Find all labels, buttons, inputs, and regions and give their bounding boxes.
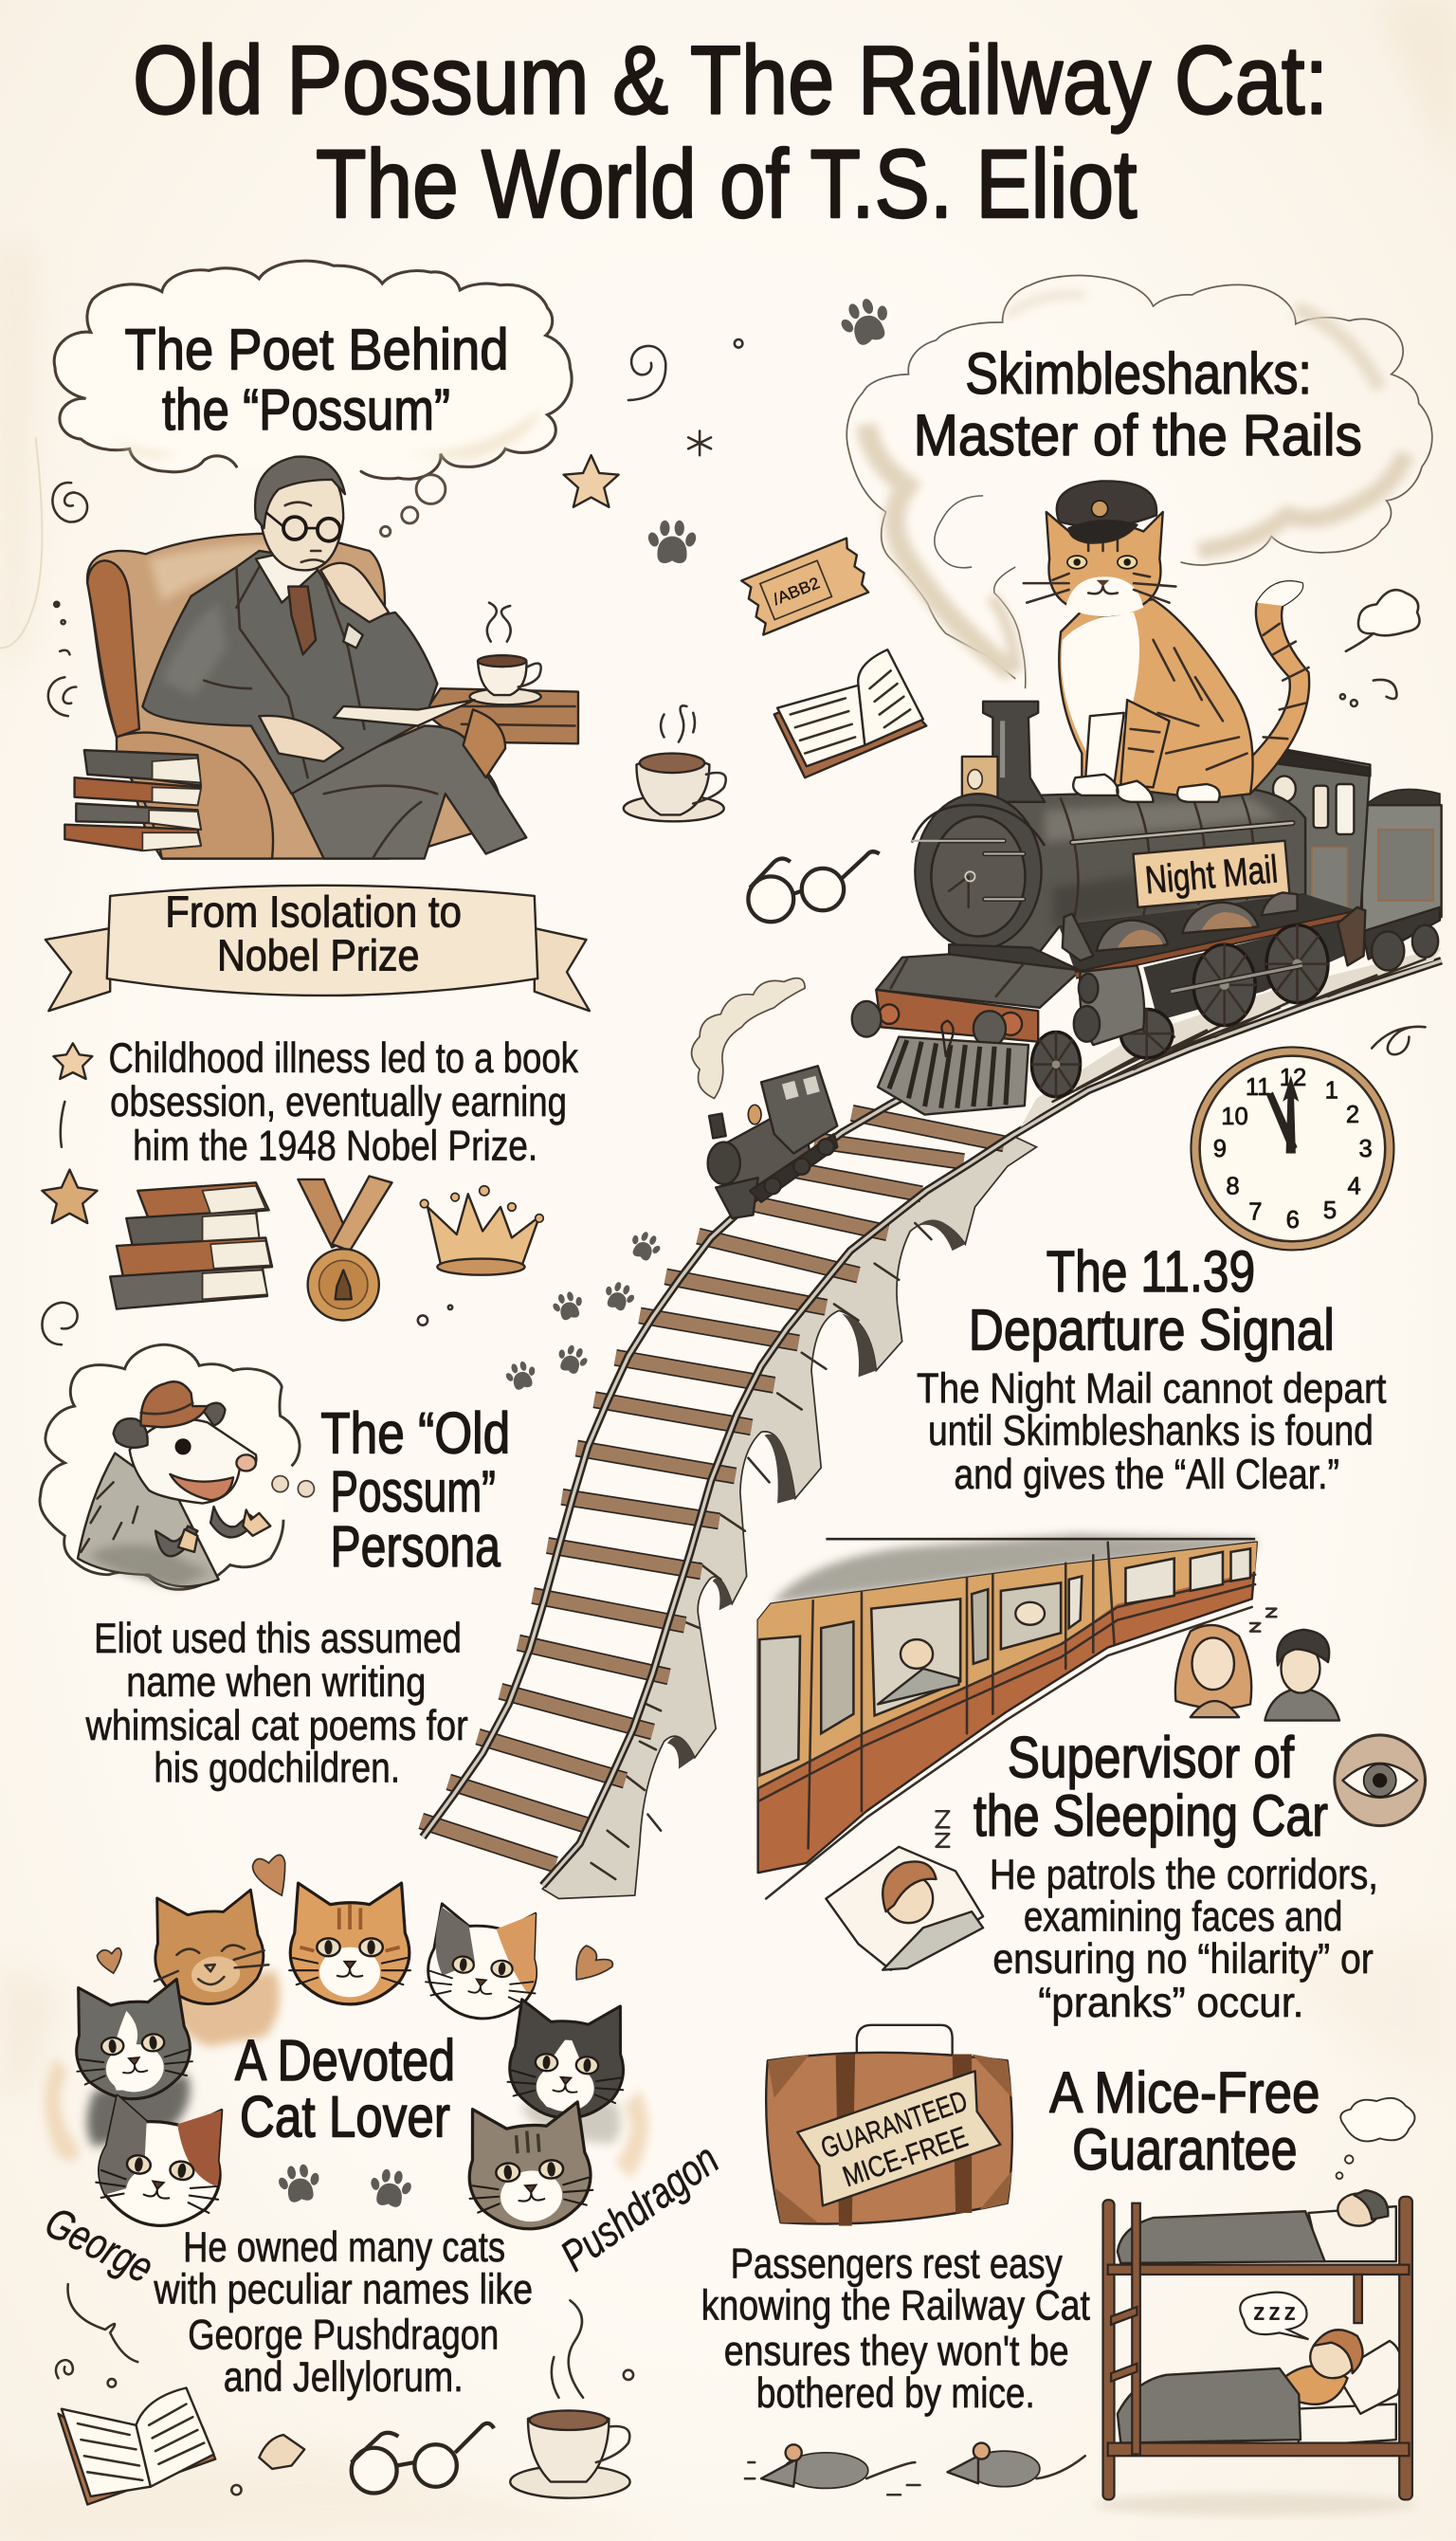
front legs <box>1085 713 1124 784</box>
icon: small shell doodle <box>259 2435 304 2469</box>
cab <box>761 1066 837 1154</box>
carriage windows <box>759 1548 1250 1776</box>
text: devoted cat lover: with peculiar names like <box>153 2267 533 2313</box>
small distant train with smoke <box>692 978 837 1218</box>
text: childhood illness with star: him the 1948 Nobel Prize. <box>133 1123 537 1169</box>
boiler <box>976 789 1305 956</box>
book on lap <box>334 700 475 725</box>
heading: The 11.39 Departure Signal <box>969 1239 1335 1362</box>
icon: medal <box>298 1176 391 1321</box>
heading: The Old Possum Persona: Persona <box>331 1514 501 1580</box>
decorative spirals and dots left <box>48 483 87 716</box>
paw print: top <box>834 293 897 351</box>
decoration: lower left swirl and marks <box>42 1102 452 1344</box>
nameplate: Night Mail <box>1143 847 1280 902</box>
splashers <box>1097 921 1168 951</box>
text: old possum: name when writing <box>126 1659 426 1706</box>
Skimbleshanks the cat <box>1024 481 1309 802</box>
paws centre <box>275 2162 415 2209</box>
clock: 9 <box>1213 1136 1227 1162</box>
rails <box>423 1069 956 1837</box>
hands <box>259 716 343 761</box>
conductor cap <box>1057 481 1156 527</box>
hearts <box>98 1855 612 1980</box>
railway track and viaduct <box>421 948 1442 1898</box>
raised arm and hand <box>210 1507 256 1537</box>
title: The World of T.S. Eliot <box>316 129 1137 238</box>
carriage lower panel <box>758 1543 1257 1873</box>
sleeping passenger <box>826 1811 983 1970</box>
head <box>130 1419 256 1504</box>
legs <box>288 725 526 859</box>
boiler <box>719 1102 810 1193</box>
text: devoted cat lover <box>153 2224 533 2401</box>
icon: stack of books <box>110 1182 272 1309</box>
cat: calico top right <box>423 1903 543 2024</box>
text: old possum: his godchildren. <box>154 1745 400 1791</box>
paw trail <box>502 1227 665 1393</box>
clock: 10 <box>1221 1104 1248 1130</box>
text: mice-free <box>701 2240 1090 2417</box>
heading: A Mice-Free Guarantee <box>1049 2060 1320 2183</box>
text: devoted cat lover: and Jellylorum. <box>224 2354 464 2401</box>
body <box>1059 599 1253 798</box>
speech cloud: The Poet Behind the Possum: The Poet Behind <box>125 318 508 383</box>
clock: 8 <box>1226 1173 1240 1199</box>
mice <box>745 2443 1085 2495</box>
clock: 5 <box>1323 1197 1337 1224</box>
clock: 4 <box>1348 1173 1361 1199</box>
bed frame <box>1103 2197 1412 2499</box>
text: devoted cat lover: He owned many cats <box>183 2224 505 2271</box>
heading: Supervisor of the Sleeping Car: Supervisor of <box>1008 1725 1295 1790</box>
tender <box>1362 790 1442 970</box>
heading: Supervisor of the Sleeping Car <box>974 1725 1328 1849</box>
buffer beam and buffers <box>876 990 1038 1042</box>
icon: star left <box>42 1170 98 1223</box>
decorative spiral and dots top centre <box>628 339 742 455</box>
speech cloud: The Poet Behind the Possum: the “Possum” <box>162 377 450 443</box>
smoke <box>692 978 805 1098</box>
front deck <box>876 954 1081 1008</box>
heading: The Old Possum Persona: Possum” <box>331 1459 496 1525</box>
clock: 11 <box>1246 1074 1270 1101</box>
heading: The 11.39 Departure Signal: The 11.39 <box>1046 1239 1255 1305</box>
icon: ticket <box>741 537 871 634</box>
cab <box>1252 748 1370 921</box>
icon: ticket: /ABB2 <box>771 574 822 609</box>
heading: The Old Possum Persona <box>320 1401 510 1580</box>
zzz bubble: zzz <box>1253 2300 1296 2326</box>
heading: A Mice-Free Guarantee: A Mice-Free <box>1049 2060 1320 2126</box>
heading: A Mice-Free Guarantee: Guarantee <box>1072 2117 1298 2183</box>
icon: star <box>564 455 619 507</box>
suitcase with mice-free label <box>766 2025 1012 2226</box>
title <box>133 26 1328 238</box>
armchair <box>87 534 500 859</box>
clock: 12 <box>1280 1065 1306 1091</box>
text: mice-free: knowing the Railway Cat <box>701 2283 1090 2330</box>
icon: coffee cup bottom <box>510 2410 630 2498</box>
saddle and steam pipe <box>949 944 1081 970</box>
undercarriage <box>766 1607 1252 1898</box>
suitcase with mice-free label: MICE-FREE <box>839 2120 972 2193</box>
text: supervisor <box>990 1852 1378 2026</box>
small puff and marks right <box>1340 590 1420 706</box>
steam cloud: Skimbleshanks heading <box>846 276 1432 688</box>
text: departure signal <box>917 1366 1387 1498</box>
ribbon banner: From Isolation to Nobel Prize <box>46 886 590 1011</box>
text: devoted cat lover: George Pushdragon <box>188 2312 499 2358</box>
paw print: middle <box>646 521 698 563</box>
text: childhood illness with star <box>53 1035 579 1169</box>
text: supervisor: examining faces and <box>1024 1894 1342 1941</box>
locomotive: Night Mail <box>852 702 1442 1115</box>
cylinder <box>1080 965 1144 1045</box>
dark frame under boiler <box>1059 894 1357 972</box>
text: supervisor: He patrols the corridors, <box>990 1852 1378 1898</box>
tail <box>1247 581 1309 794</box>
possum <box>78 1381 270 1587</box>
text: departure signal: until Skimbleshanks is found <box>928 1408 1374 1454</box>
head <box>1046 512 1163 615</box>
heading: A Devoted Cat Lover: Cat Lover <box>240 2085 450 2150</box>
heading: The Old Possum Persona: The “Old <box>320 1401 510 1467</box>
text: old possum: Eliot used this assumed <box>94 1616 462 1662</box>
clock: 7 <box>1248 1199 1263 1226</box>
bunk bed <box>1093 2190 1417 2515</box>
text: departure signal: The Night Mail cannot depart <box>917 1366 1387 1413</box>
text: mice-free: Passengers rest easy <box>731 2240 1063 2287</box>
illustration: Eliot in armchair <box>64 457 578 859</box>
cowcatcher <box>878 1037 1028 1115</box>
clock: 2 <box>1346 1102 1359 1128</box>
wisps beside cats <box>45 2057 78 2161</box>
text: childhood illness with star: obsession, eventually earning <box>110 1079 567 1125</box>
heading: A Devoted Cat Lover: A Devoted <box>235 2028 455 2093</box>
cat: grey left <box>70 1979 199 2148</box>
ribbon banner: From Isolation to Nobel Prize: From Isolation to <box>165 887 462 936</box>
cat: calico bottom left <box>91 2094 230 2234</box>
side table and teacup <box>425 603 578 743</box>
handrail <box>1072 823 1292 843</box>
suitcase with mice-free label: GUARANTEED <box>817 2084 972 2165</box>
roof shadow <box>771 1534 1257 1604</box>
icon: eye <box>1335 1735 1426 1826</box>
icon: glasses <box>748 851 880 922</box>
label: Pushdragon: Pushdragon <box>552 2134 727 2280</box>
stone viaduct with arches <box>542 1136 1036 1898</box>
text: old possum: whimsical cat poems for <box>85 1703 468 1749</box>
icon: open book <box>774 649 926 777</box>
cat: orange top <box>289 1883 410 2004</box>
hat <box>141 1381 208 1427</box>
text: supervisor: “pranks” occur. <box>1038 1980 1303 2026</box>
clock <box>1195 1051 1390 1246</box>
icon: glasses bottom <box>352 2423 494 2494</box>
mark near clock <box>1372 1027 1426 1054</box>
sleepy passengers <box>1175 1609 1339 1721</box>
ribbon banner: From Isolation to Nobel Prize: Nobel Prize <box>217 930 420 979</box>
clock: 1 <box>1325 1077 1338 1104</box>
jacket <box>142 551 437 794</box>
steam cloud: Skimbleshanks heading: Skimbleshanks: <box>965 341 1312 407</box>
text: mice-free: bothered by mice. <box>756 2370 1035 2417</box>
text: mice-free: ensures they won't be <box>724 2329 1069 2375</box>
upper sheet, blanket and sleeper <box>1309 2206 1396 2261</box>
books by chair <box>64 750 201 850</box>
lower sheet, blanket and sleeper <box>1296 2404 1396 2446</box>
heading: The 11.39 Departure Signal: Departure Signal <box>969 1297 1335 1362</box>
text: departure signal: and gives the “All Clear.” <box>954 1452 1339 1498</box>
speech cloud: The Poet Behind the Possum <box>54 261 572 479</box>
smokebox <box>915 794 1042 949</box>
icon: crown <box>420 1186 543 1275</box>
icon: open book bottom <box>59 2387 215 2504</box>
carriage upper band <box>758 1543 1257 1788</box>
ballast hatch behind locomotive <box>1020 948 1442 1127</box>
heading: A Devoted Cat Lover <box>235 2028 455 2150</box>
text: childhood illness with star: Childhood illness led to a book <box>108 1035 579 1082</box>
cat: tabby bottom right <box>464 2101 595 2233</box>
steam cloud: Skimbleshanks heading: Master of the Rails <box>914 403 1362 468</box>
text: old possum <box>85 1616 468 1791</box>
text: supervisor: ensuring no “hilarity” or <box>992 1936 1374 1983</box>
clock: 3 <box>1358 1136 1373 1162</box>
circle of cats <box>45 1883 648 2234</box>
clock: 6 <box>1286 1207 1300 1234</box>
illustration: sleeping car train <box>758 1534 1257 1898</box>
thought bubbles <box>381 475 446 537</box>
sleepers <box>421 1113 1004 1865</box>
bottom doodles <box>56 2284 633 2495</box>
zzz bubble <box>1240 2293 1309 2339</box>
running plate <box>1075 914 1357 976</box>
possum thought bubble <box>40 1344 314 1589</box>
icon: coffee cup <box>624 705 726 821</box>
cat: ginger smiling <box>147 1888 283 2051</box>
chimney and lamp <box>978 702 1045 802</box>
label: George: George <box>38 2197 161 2293</box>
heading: Supervisor of the Sleeping Car: the Sleeping Car <box>974 1783 1328 1849</box>
cat: dark right <box>504 1999 628 2145</box>
wheels <box>1031 925 1328 1097</box>
thought cloud small <box>1337 2098 1415 2179</box>
head <box>261 460 343 570</box>
